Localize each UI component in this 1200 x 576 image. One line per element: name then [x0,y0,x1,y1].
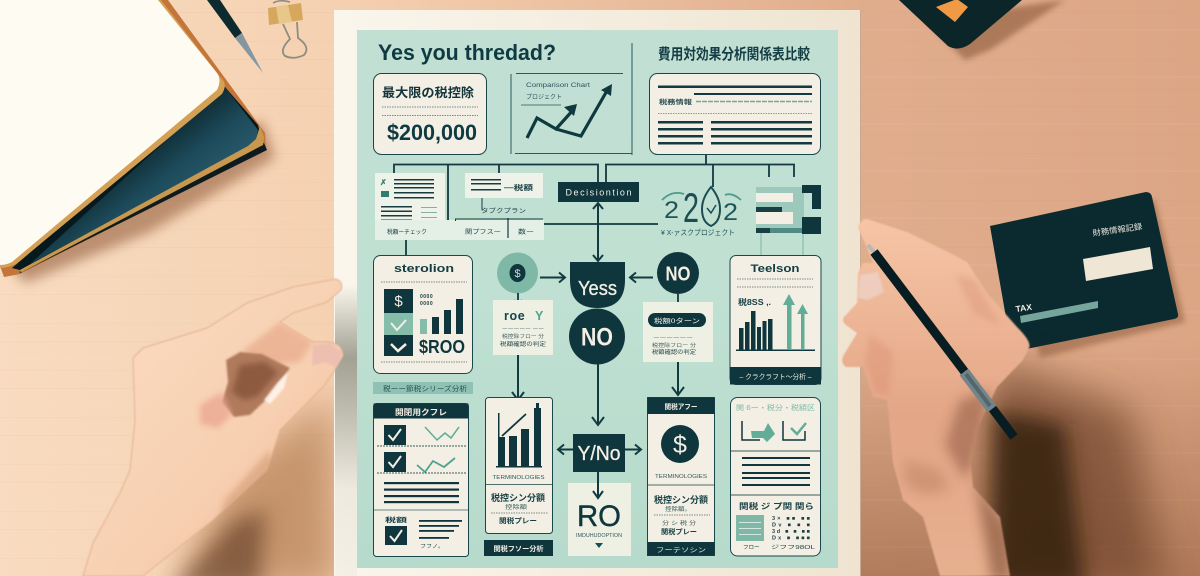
y/no box [573,434,625,472]
panel: bar chart: 関税プレー [499,516,537,525]
document: checklist: ✗ [380,178,387,187]
no detail box [643,302,713,362]
panel: dollar: 関税プレー [661,527,697,536]
roe Y box [493,300,553,355]
card cream field [1083,247,1153,281]
panel heading: 最大限の税控除 [382,85,475,100]
header divider [631,43,633,155]
mint heading: 関 6ー・税分・税額区 [736,403,815,412]
bar chart [736,311,815,351]
label strip [375,219,544,240]
mint note [736,515,764,541]
icon: mint dollar circle [497,252,538,294]
panel: text summary [650,74,820,154]
label strip: 数ー [518,228,534,236]
caption: chart panel footer [484,540,553,556]
mint arrows [783,294,808,349]
panel: bar chart: 税控シン分額 [491,492,545,503]
ro box [568,483,631,556]
row 2 [384,452,455,472]
card heading: 財務情報記録 [1092,221,1143,238]
amount: $200,000 [387,120,477,145]
panel: dollar: フーテソシン [656,546,706,554]
panel heading: Teelson [750,263,800,275]
summary label: 税務情報 [659,97,693,106]
pen in right hand [868,245,1014,437]
panel: teelson: – クラクラフト〜分析 – [740,372,812,381]
no circle small: NO [666,264,690,286]
data grid: Dv ■ ■ ■ [772,522,810,528]
card mint bar [1020,301,1098,323]
row 3 [385,515,462,550]
calculator [899,0,1065,60]
no detail box: 税額確認の判定 [652,348,697,356]
row 1 [384,425,459,445]
left hand [83,279,343,576]
panel: dollar: 控除額。 [665,505,691,513]
row 3: フフノ。 [420,543,444,550]
block icon [756,185,821,234]
panel: dollar: 税控シン分額 [654,494,708,505]
panel: sterolion: 0000 [420,294,433,300]
comparison chart [511,74,632,154]
decision box: Decisiontion [566,188,632,198]
no circle large: NO [581,324,613,352]
roe Y box: 税額確認の判定 [500,340,547,348]
mint infographic panel [357,30,838,568]
arrow: decision to yes [593,203,603,261]
data grid [772,516,810,542]
card tax label: TAX [1015,302,1033,314]
roe Y box: 税控除フロー 分 [502,333,544,340]
icon: binder clip [268,1,306,58]
arrow: no box to dollar panel [672,362,684,395]
connector under label strip [507,218,509,238]
notebook [0,0,275,283]
label strip: 税額ーチェック [387,228,427,236]
right hand shadow [985,360,1165,576]
panel: bar chart [486,398,552,534]
document: checklist [375,173,445,223]
icon: dollar coin: $ [673,431,687,459]
trend arrows [527,109,574,138]
bars [496,403,542,468]
document: small note [465,173,543,198]
arrows: y/no sides [558,444,641,454]
panel: dollar: 分 シ 税 分 [662,519,697,527]
logo: 2202 emblem: 2 [723,199,738,226]
panel: dollar: 関税アフー [664,402,698,411]
panel: sterolion [374,256,472,374]
ro box: RO [577,500,621,533]
panel: bar chart: 控除額 [505,503,528,511]
ro box: IMDUHUDOPTION [576,533,622,539]
panel footer [730,367,821,384]
arrow: no to yes [630,272,653,282]
flow connectors top [394,155,803,255]
right hand [842,219,1030,576]
caption: chart panel footer: 関税フソー分析 [494,544,544,553]
panel: checklist: 開閉用クフレ [395,407,447,417]
caption strip: 税ーー節税シリーズ分析 [383,384,467,393]
yes shield: Yess [578,278,617,300]
data grid: 3d ■ ■ ■■ [772,529,810,535]
arrow: circle to yes [540,272,565,282]
paper sheet [334,10,861,576]
arrow: no small down [674,294,682,310]
panel header [648,398,714,414]
title: Yes you thredad? [378,40,556,65]
roe Y box: ーーーーー ーー [502,327,544,333]
icons: axis arrows [742,421,806,442]
row 3: 税額 [385,515,408,524]
grid footer: フロー [743,544,760,551]
no circle large [569,308,625,364]
roe Y box: roe [504,309,525,323]
chart title: Comparison Chart [526,82,590,89]
panel: $200,000 [374,74,486,154]
label strip: 関プフスー [465,229,501,236]
data grid: 3× ■■ ■■ [772,516,810,522]
icon: dollar coin [661,425,699,463]
logo caption: ¥ X-ァスクプロジェクト [661,228,735,237]
panel header [374,404,468,418]
chart caption: TERMINOLOGIES [492,475,545,481]
yes shield [570,262,625,308]
right heading: 費用対効果分析関係表比較 [658,45,810,63]
panel: summary grid [730,398,820,556]
status blocks: $ [394,293,403,310]
panel: summary grid: ジフフ98OL [771,544,815,551]
tax card [990,192,1185,358]
left hand shadow [170,395,340,576]
logo: 2202 emblem [661,184,741,237]
logo: 2202 emblem: 2 [683,184,699,231]
panel: teelson: 税8SS ,. [738,297,771,307]
no detail box: ーーーーーー [653,336,693,342]
logo: 2202 emblem: 2 [664,197,679,224]
grid heading: 関税 ジ プ関 関ら [739,501,814,511]
bar chart [420,299,463,334]
arrow: roe to chart [512,355,524,400]
no detail box: 税控除フロー 分 [652,342,696,349]
no detail box: 税額0ターン [654,316,700,325]
panel: checklist [374,404,468,556]
arrow: circle down [514,293,522,305]
arrow: no to y/no [592,364,604,425]
comparison chart: プロジェクト [526,94,562,101]
caption strip [373,382,473,394]
note label: —税額 [504,183,533,192]
no circle small [657,252,699,294]
data grid: Dx ■ ■■■ [772,536,810,542]
roe Y box: Y [535,309,544,323]
pen top left [207,0,263,73]
panel: dollar: TERMINOLOGIES [655,474,707,480]
panel: dollar [648,398,714,556]
panel: sterolion: 0000 [420,301,433,307]
panel: teelson [730,256,821,384]
icon: mint dollar circle: $ [514,268,521,280]
decision box [558,182,639,202]
small caption: タブクプラン [481,207,526,215]
arrow: y/no to ro [593,472,603,498]
panel heading: sterolion [394,263,454,275]
y/no box: Y/No [578,443,620,465]
amount: $ROO [419,337,465,357]
panel footer [648,542,714,556]
